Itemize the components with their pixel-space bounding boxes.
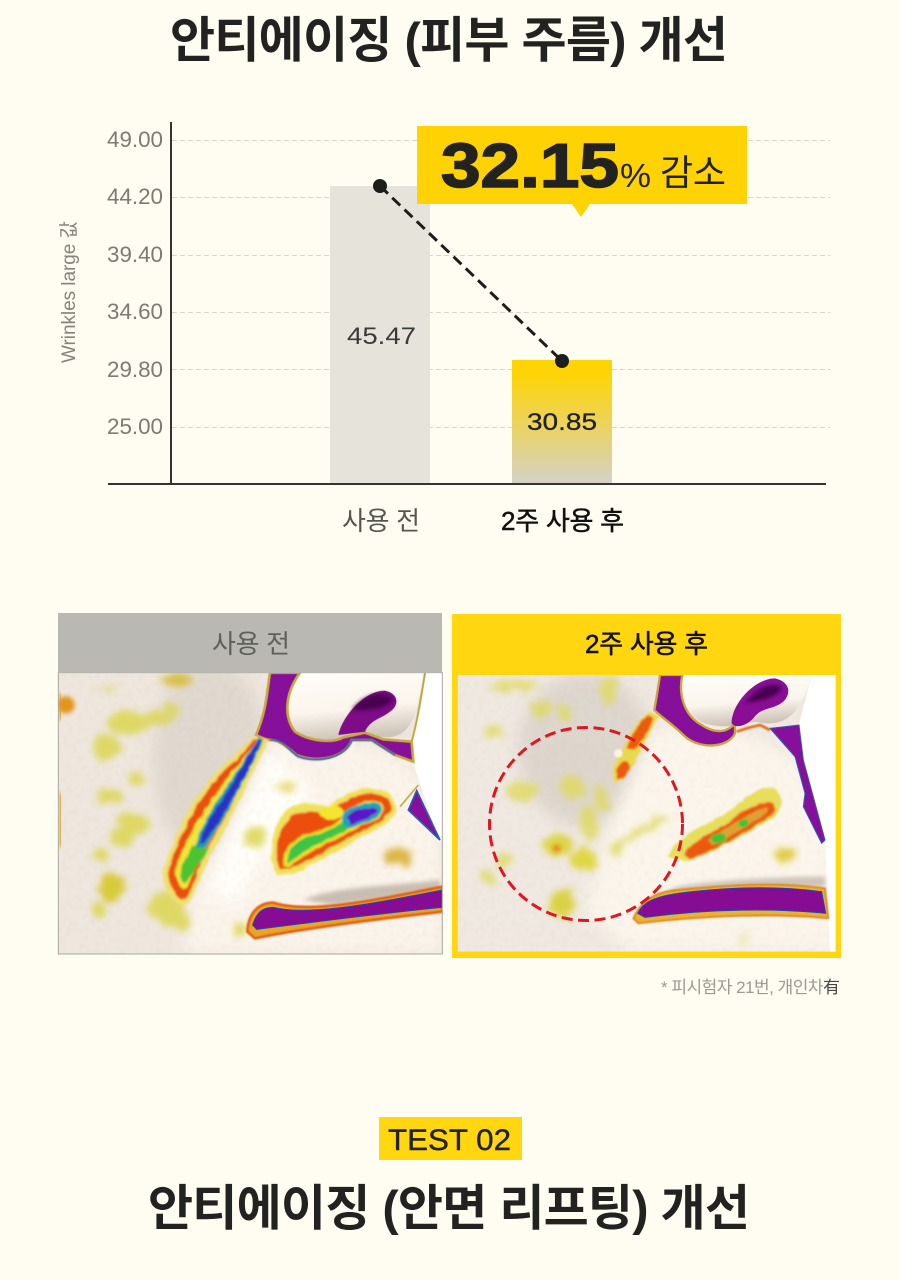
footnote: * 피시험자 21번, 개인차有 bbox=[661, 978, 840, 997]
yellow frame bbox=[452, 614, 841, 958]
upper lip shadow bbox=[662, 877, 825, 893]
y-axis tick labels: 25.00 bbox=[107, 414, 163, 439]
y-axis title: Wrinkles large 값 bbox=[58, 221, 80, 363]
yellow blotches bbox=[90, 675, 410, 936]
bar chart bbox=[58, 122, 830, 536]
panel header: before: 사용 전 bbox=[212, 629, 290, 659]
bar: after bbox=[512, 360, 612, 484]
panel header: before bbox=[58, 613, 442, 672]
upper lip shadow bbox=[303, 880, 441, 905]
panel: before bbox=[57, 613, 442, 954]
badge: TEST 02 bbox=[379, 1117, 522, 1160]
dashed circle highlight bbox=[490, 728, 682, 920]
axes bbox=[108, 122, 826, 484]
cheek heat streak bbox=[668, 787, 781, 862]
purple band around the nose bbox=[654, 675, 735, 745]
value: before: 45.47 bbox=[347, 323, 416, 350]
x label: before: 사용 전 bbox=[342, 506, 420, 536]
y-axis tick labels: 34.60 bbox=[107, 299, 163, 324]
callout: 32.15% reduction: % bbox=[620, 157, 651, 194]
nasolabial fold heat band bbox=[163, 737, 268, 905]
cheek heat patch bbox=[271, 788, 396, 875]
badge: TEST 02: TEST 02 bbox=[388, 1124, 511, 1157]
title: 안티에이징 (피부 주름) 개선 bbox=[170, 14, 728, 68]
y-axis tick labels: 29.80 bbox=[107, 357, 163, 382]
right nose wedge bbox=[408, 791, 440, 840]
nose bbox=[284, 673, 425, 741]
lips bbox=[633, 885, 828, 923]
heatmap image: after bbox=[458, 673, 836, 953]
lips bbox=[247, 887, 442, 938]
panel header: after: 2주 사용 후 bbox=[585, 629, 708, 659]
y-axis tick labels: 39.40 bbox=[107, 242, 163, 267]
value: after: 30.85 bbox=[527, 409, 597, 436]
purple band around the nose bbox=[256, 673, 413, 762]
nostril bbox=[338, 691, 396, 735]
callout: 32.15% reduction bbox=[417, 126, 747, 217]
y-axis tick labels: 44.20 bbox=[107, 184, 163, 209]
bar: before bbox=[330, 186, 430, 484]
panel: after bbox=[452, 614, 841, 958]
nostril bbox=[732, 678, 788, 726]
yellow blotches bbox=[482, 675, 796, 944]
nose bbox=[680, 675, 812, 726]
x label: after: 2주 사용 후 bbox=[501, 506, 624, 536]
callout: 32.15% reduction: 32.15 bbox=[441, 132, 619, 201]
callout: 32.15% reduction: 감소 bbox=[660, 152, 726, 193]
heatmap image: before bbox=[57, 660, 442, 954]
left edge tint bbox=[454, 680, 462, 727]
heading: face lifting: 안티에이징 (안면 리프팅) 개선 bbox=[148, 1182, 750, 1236]
nasolabial fold remnant bbox=[613, 712, 658, 782]
y-axis tick labels: 49.00 bbox=[107, 127, 163, 152]
y-axis tick labels bbox=[107, 127, 163, 439]
trend line bbox=[373, 179, 569, 368]
